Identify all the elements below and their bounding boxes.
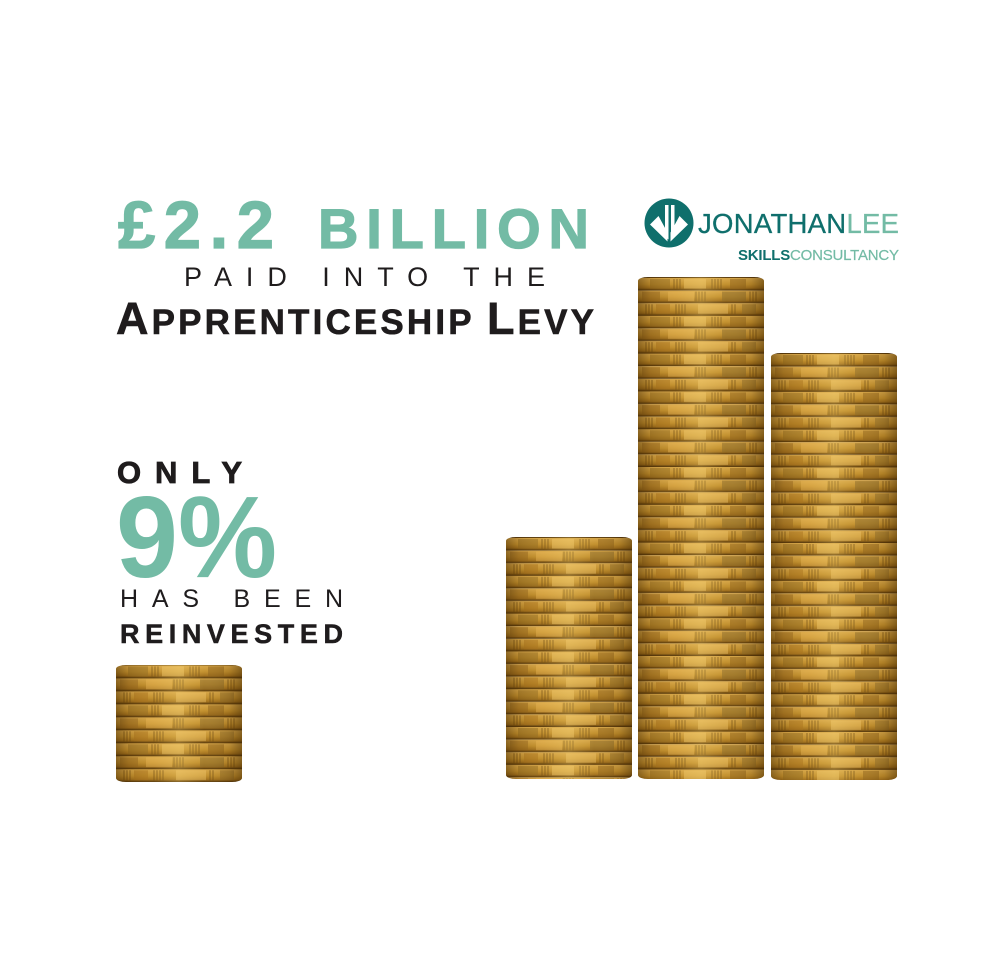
coin stack: medium [771, 353, 897, 780]
text: only: ONLY [117, 455, 242, 490]
stat: 9%: 9% [116, 472, 277, 602]
title: £2.2 billion: BILLION [318, 197, 589, 260]
logo strapline: SKILLSCONSULTANCY [738, 247, 899, 264]
title: £2.2 billion [118, 188, 589, 263]
logo wordmark: JONATHANLEE [698, 208, 899, 239]
text: has been: HAS BEEN [120, 585, 343, 613]
coin stack: short [506, 537, 632, 779]
logo: Jonathan Lee Skills Consultancy [644, 198, 899, 264]
coin stack: tall [638, 277, 764, 779]
subtitle: paid into the: PAID INTO THE [184, 262, 545, 292]
coin stack: 9% reinvested [116, 665, 242, 782]
icon: logo arrow badge [644, 198, 694, 248]
text: reinvested: REINVESTED [120, 619, 343, 649]
heading: Apprenticeship Levy: APPRENTICESHIP LEVY [116, 293, 594, 344]
title: £2.2 billion: £2.2 [118, 188, 274, 263]
